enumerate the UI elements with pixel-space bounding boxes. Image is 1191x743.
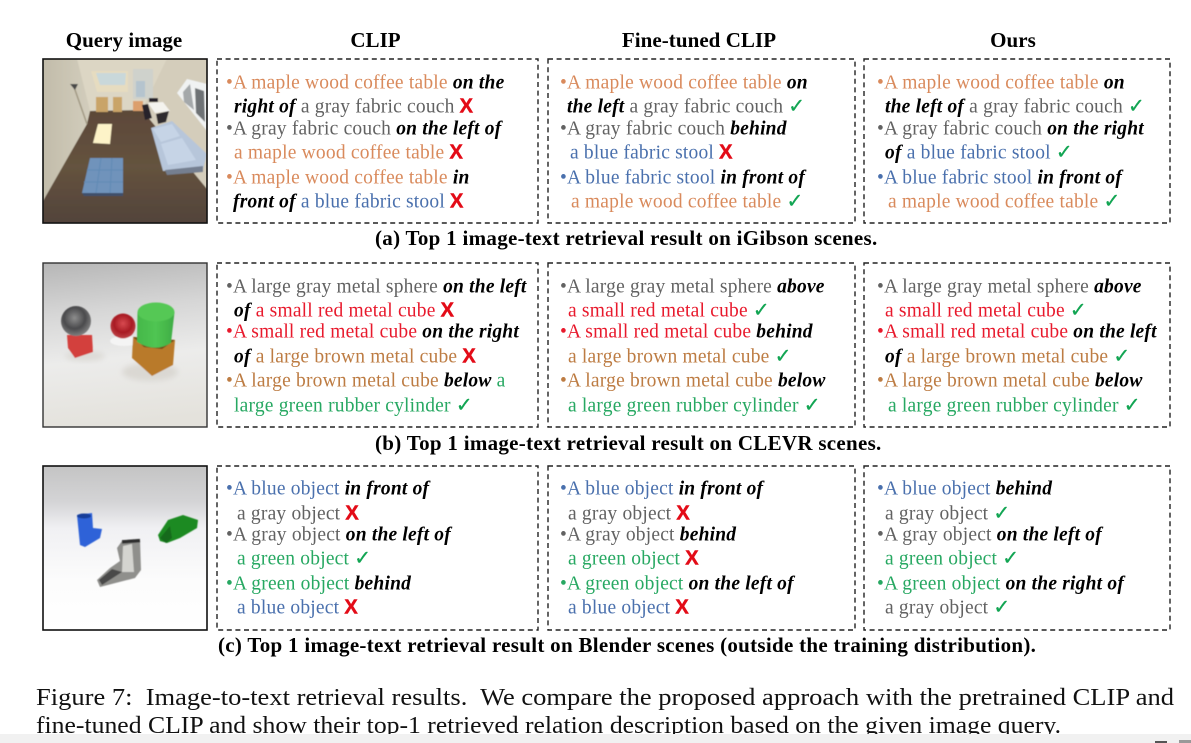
panel: Fine-tuned CLIP results on CLEVR — [548, 263, 855, 427]
query image: CLEVR scene — [43, 263, 207, 427]
panel: Ours results on CLEVR — [864, 263, 1170, 427]
statement: gray behind green, wrong — [560, 525, 736, 570]
statement: brown cube below cylinder, correct: •A large brown metal cube below — [560, 371, 826, 392]
statement: brown cube below cylinder, correct: •A large brown metal cube below — [877, 371, 1143, 392]
statement: green left of blue, wrong — [560, 574, 796, 619]
statement: coffee table in front of stool, wrong: •A maple wood coffee table in — [226, 168, 470, 189]
statement: couch left of coffee table, wrong: a maple wood coffee table X — [234, 142, 463, 164]
statement: gray behind green, wrong: •A gray object behind — [560, 525, 736, 546]
statement: brown cube below cylinder, correct — [226, 371, 506, 417]
query image: iGibson room — [43, 59, 207, 223]
statement: blue in front of gray, wrong: •A blue object in front of — [560, 479, 766, 500]
statement: coffee table right of couch, wrong: right of a gray fabric couch X — [234, 96, 474, 118]
statement: blue behind gray, correct: •A blue object behind — [877, 479, 1052, 500]
statement: sphere above red cube, correct: •A large gray metal sphere above — [560, 277, 825, 298]
statement: sphere left of red cube, wrong — [226, 277, 527, 322]
statement: red cube behind brown cube, correct: a large brown metal cube ✓ — [568, 344, 791, 368]
statement: brown cube below cylinder, correct — [560, 371, 826, 417]
statement: blue behind gray, correct: a gray object ✓ — [885, 501, 1010, 525]
statement: sphere above red cube, correct: a small red metal cube ✓ — [568, 298, 770, 322]
statement: red cube behind brown cube, correct — [560, 322, 813, 368]
panel: Ours results on iGibson — [864, 59, 1170, 223]
statement: sphere above red cube, correct — [560, 277, 825, 322]
statement: couch behind stool, wrong — [560, 119, 787, 164]
statement: brown cube below cylinder, correct: large green rubber cylinder ✓ — [234, 393, 473, 417]
statement: red cube left of brown cube, correct: of a large brown metal cube ✓ — [885, 344, 1130, 368]
statement: stool in front of coffee table, correct — [877, 168, 1124, 213]
statement: coffee table left of couch, correct — [560, 73, 808, 118]
statement: blue in front of gray, wrong: a gray object X — [568, 503, 690, 525]
statement: sphere left of red cube, wrong: of a small red metal cube X — [234, 300, 455, 322]
statement: gray left of green, correct: •A gray object on the left of — [226, 525, 453, 546]
statement: green behind blue, wrong — [226, 574, 411, 619]
statement: blue in front of gray, wrong — [226, 479, 432, 525]
statement: couch right of stool, correct: •A gray fabric couch on the right — [877, 119, 1144, 140]
statement: blue in front of gray, wrong: •A blue object in front of — [226, 479, 432, 500]
statement: red cube right of brown cube, wrong — [226, 322, 519, 368]
statement: coffee table in front of stool, wrong — [226, 168, 470, 213]
statement: stool in front of coffee table, correct — [560, 168, 807, 213]
statement: blue in front of gray, wrong — [560, 479, 766, 525]
statement: brown cube below cylinder, correct — [877, 371, 1143, 417]
subcaption (b): (b) Top 1 image-text retrieval result on CLEVR scenes. — [375, 431, 882, 455]
statement: green behind blue, wrong: a blue object X — [237, 597, 358, 619]
query image: Blender scene — [43, 466, 207, 630]
statement: gray left of green, correct: •A gray object on the left of — [877, 525, 1104, 546]
header: Ours: Ours — [990, 28, 1036, 52]
statement: couch left of coffee table, wrong: •A gray fabric couch on the left of — [226, 119, 504, 140]
statement: coffee table left of couch, correct — [877, 73, 1145, 118]
statement: green behind blue, wrong: •A green object behind — [226, 574, 411, 595]
statement: coffee table right of couch, wrong: •A maple wood coffee table on the — [226, 73, 505, 94]
figure caption: Figure 7: Image-to-text retrieval results. We compare the proposed approach with the pretrained CLIP and — [36, 684, 1174, 711]
figure caption — [36, 684, 1174, 739]
statement: red cube right of brown cube, wrong: of a large brown metal cube X — [234, 346, 476, 368]
header: Query image: Query image — [66, 28, 182, 52]
statement: stool in front of coffee table, correct: a maple wood coffee table ✓ — [571, 189, 803, 213]
statement: stool in front of coffee table, correct: •A blue fabric stool in front of — [560, 168, 807, 189]
statement: couch behind stool, wrong: •A gray fabric couch behind — [560, 119, 787, 140]
subcaption (a): (a) Top 1 image-text retrieval result on iGibson scenes. — [375, 226, 878, 250]
statement: stool in front of coffee table, correct: •A blue fabric stool in front of — [877, 168, 1124, 189]
statement: coffee table in front of stool, wrong: front of a blue fabric stool X — [233, 191, 464, 213]
header: Fine-tuned CLIP: Fine-tuned CLIP — [622, 28, 776, 52]
panel: Ours results on Blender — [864, 466, 1170, 630]
panel: CLIP results on CLEVR — [217, 263, 538, 427]
bottom browser bar — [0, 734, 1191, 743]
statement: blue in front of gray, wrong: a gray object X — [237, 503, 359, 525]
panel: Fine-tuned CLIP results on Blender — [548, 466, 855, 630]
panel: Fine-tuned CLIP results on iGibson — [548, 59, 855, 223]
statement: green right of gray, correct — [877, 574, 1126, 619]
statement: blue behind gray, correct — [877, 479, 1052, 525]
statement: gray left of green, correct: a green object ✓ — [885, 546, 1019, 570]
statement: coffee table right of couch, wrong — [226, 73, 505, 118]
statement: couch right of stool, correct — [877, 119, 1144, 164]
statement: red cube behind brown cube, correct: •A small red metal cube behind — [560, 322, 813, 343]
statement: green right of gray, correct: a gray object ✓ — [885, 595, 1010, 619]
statement: coffee table left of couch, correct: the left a gray fabric couch ✓ — [567, 94, 805, 118]
statement: red cube right of brown cube, wrong: •A small red metal cube on the right — [226, 322, 519, 343]
statement: couch right of stool, correct: of a blue fabric stool ✓ — [885, 140, 1073, 164]
panel: CLIP results on iGibson — [217, 59, 538, 223]
statement: green left of blue, wrong: a blue object X — [568, 597, 689, 619]
panel: CLIP results on Blender — [217, 466, 538, 630]
statement: gray behind green, wrong: a green object X — [568, 548, 699, 570]
statement: green right of gray, correct: •A green object on the right of — [877, 574, 1126, 595]
image frame — [43, 59, 207, 223]
statement: brown cube below cylinder, correct: a large green rubber cylinder ✓ — [888, 393, 1140, 417]
statement: gray left of green, correct — [226, 525, 453, 570]
statement: sphere above red cube, correct: •A large gray metal sphere above — [877, 277, 1142, 298]
statement: coffee table left of couch, correct: •A maple wood coffee table on — [560, 73, 808, 94]
statement: stool in front of coffee table, correct: a maple wood coffee table ✓ — [888, 189, 1120, 213]
statement: red cube left of brown cube, correct — [877, 322, 1157, 368]
statement: coffee table left of couch, correct: the left of a gray fabric couch ✓ — [885, 94, 1145, 118]
statement: couch left of coffee table, wrong — [226, 119, 504, 164]
statement: green left of blue, wrong: •A green object on the left of — [560, 574, 796, 595]
statement: brown cube below cylinder, correct: •A large brown metal cube below a — [226, 371, 506, 392]
subcaption (c): (c) Top 1 image-text retrieval result on Blender scenes (outside the training distribution). — [218, 633, 1036, 657]
statement: coffee table left of couch, correct: •A maple wood coffee table on — [877, 73, 1125, 94]
statement: sphere above red cube, correct: a small red metal cube ✓ — [885, 298, 1087, 322]
figure caption: fine-tuned CLIP and show their top-1 retrieved relation description based on the given image query. — [36, 712, 1061, 739]
statement: gray left of green, correct: a green object ✓ — [237, 546, 371, 570]
statement: sphere above red cube, correct — [877, 277, 1142, 322]
statement: sphere left of red cube, wrong: •A large gray metal sphere on the left — [226, 277, 527, 298]
statement: couch behind stool, wrong: a blue fabric stool X — [570, 142, 733, 164]
statement: red cube left of brown cube, correct: •A small red metal cube on the left — [877, 322, 1157, 343]
statement: brown cube below cylinder, correct: a large green rubber cylinder ✓ — [568, 393, 820, 417]
statement: gray left of green, correct — [877, 525, 1104, 570]
header: CLIP: CLIP — [350, 28, 401, 52]
